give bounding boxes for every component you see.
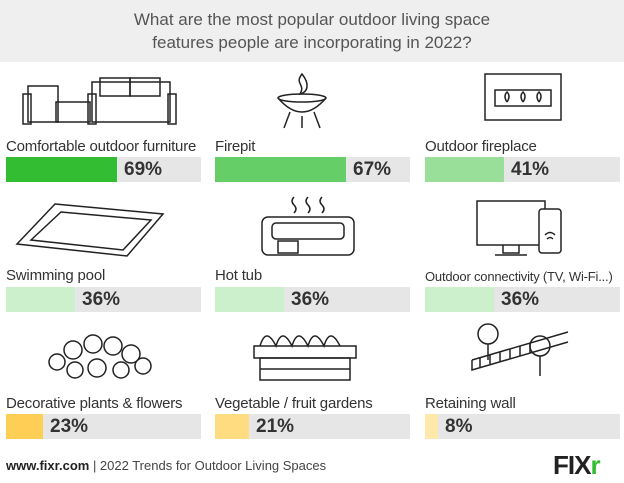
title (0, 0, 624, 62)
icon: pool (16, 203, 164, 257)
icon: connectivity (476, 200, 562, 256)
icon: garden box (253, 335, 357, 381)
label: connectivity: Outdoor connectivity (TV, Wi-Fi...) (425, 269, 613, 284)
bar: garden 21%: 21% (256, 416, 294, 437)
icon: furniture (22, 77, 177, 125)
bar: wall 8% (425, 414, 620, 439)
icon: flowers (48, 334, 152, 379)
bar: garden 21% (215, 414, 410, 439)
bar: hot tub 36% (215, 287, 410, 312)
label: fireplace: Outdoor fireplace (425, 138, 537, 155)
bar: connectivity 36%: 36% (501, 289, 539, 310)
footer text: www.fixr.com | 2022 Trends for Outdoor Living Spaces (6, 458, 326, 473)
icon: fireplace (484, 73, 562, 121)
bar: fireplace 41% (425, 157, 620, 182)
label: firepit: Firepit (215, 138, 255, 155)
icon: hot tub (261, 196, 355, 256)
bar: connectivity 36% (425, 287, 620, 312)
label: flowers: Decorative plants & flowers (6, 395, 182, 412)
bar: fireplace 41%: 41% (511, 159, 549, 180)
bar: pool 36%: 36% (82, 289, 120, 310)
logo: FIXr (553, 450, 600, 480)
label: pool: Swimming pool (6, 267, 105, 284)
bar: furniture 69%: 69% (124, 159, 162, 180)
bar: firepit 67%: 67% (353, 159, 391, 180)
icon: retaining wall (471, 323, 568, 376)
bar: flowers 23% (6, 414, 201, 439)
bar: furniture 69% (6, 157, 201, 182)
bar: wall 8%: 8% (445, 416, 472, 437)
bar: hot tub 36%: 36% (291, 289, 329, 310)
label: furniture: Comfortable outdoor furniture (6, 138, 196, 155)
bar: pool 36% (6, 287, 201, 312)
label: wall: Retaining wall (425, 395, 516, 412)
label: garden: Vegetable / fruit gardens (215, 395, 373, 412)
icon: firepit (277, 72, 327, 128)
title: What are the most popular outdoor living space (134, 10, 490, 29)
label: hot tub: Hot tub (215, 267, 262, 284)
title: features people are incorporating in 2022? (152, 33, 472, 52)
bar: firepit 67% (215, 157, 410, 182)
bar: flowers 23%: 23% (50, 416, 88, 437)
